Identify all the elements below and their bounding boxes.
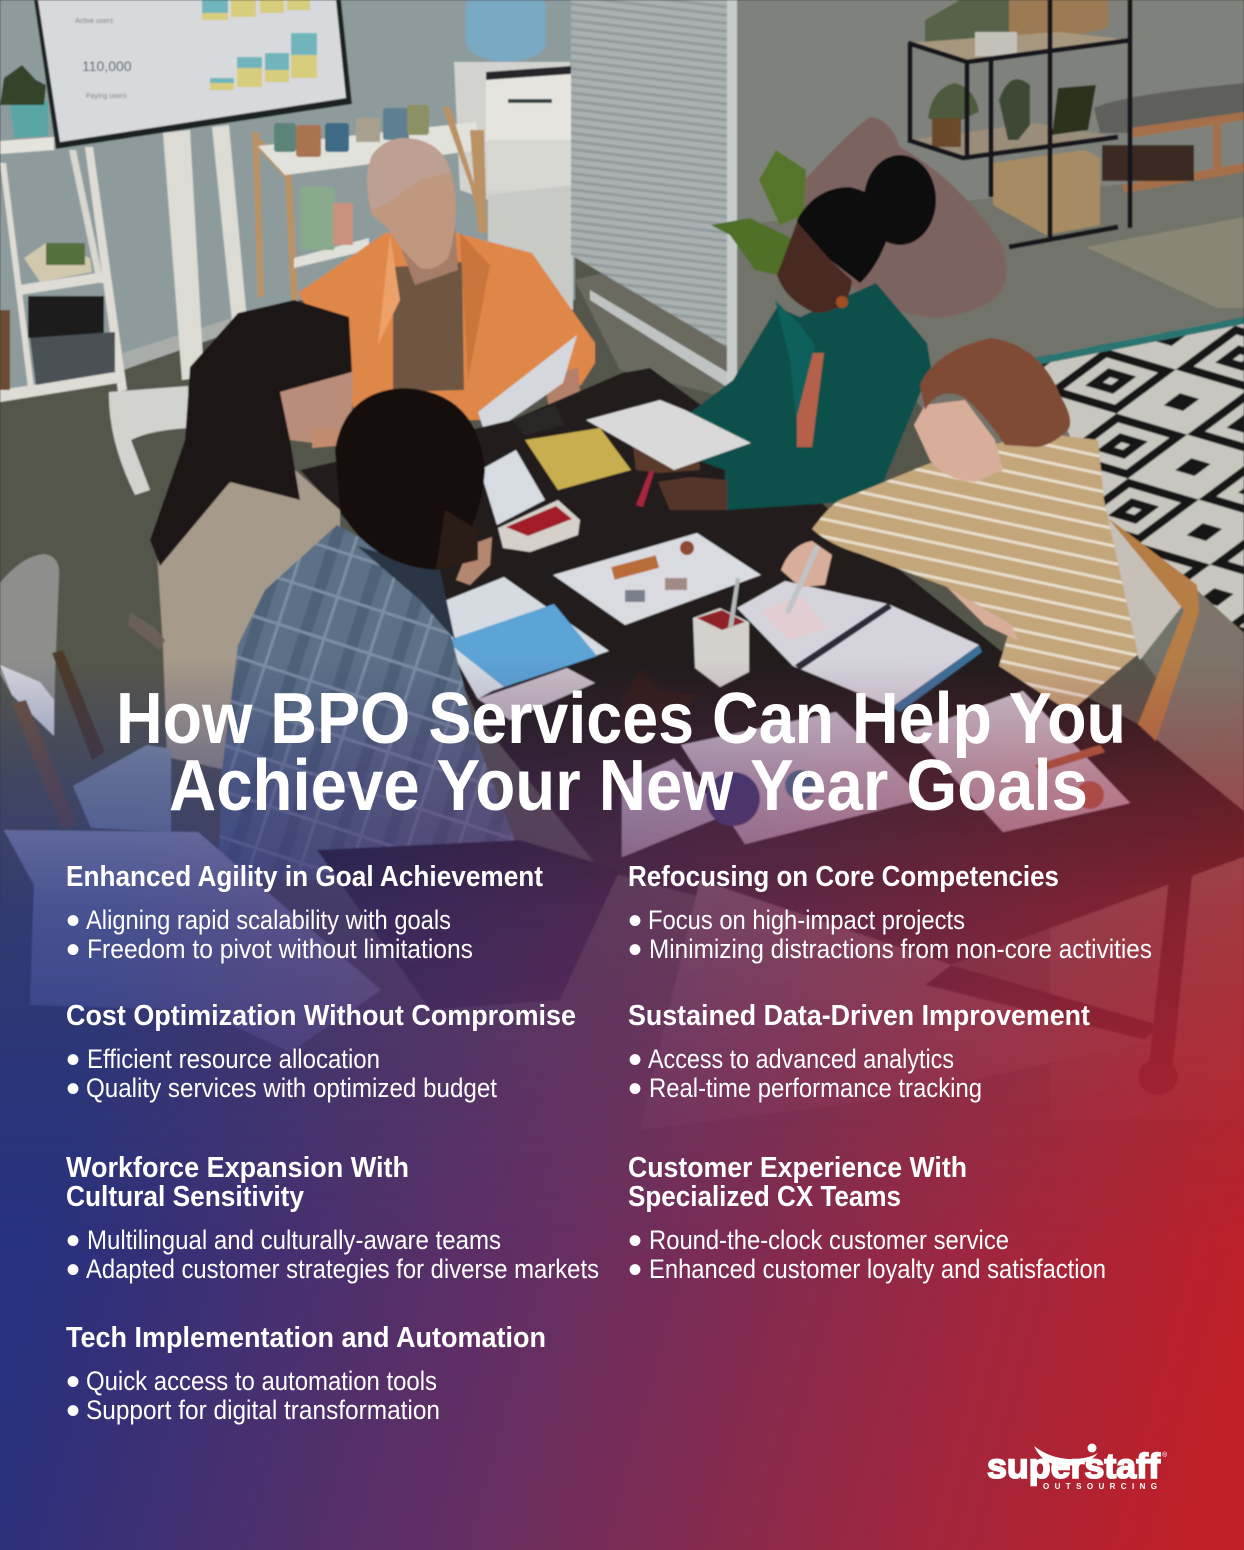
item: Sustained Data-Driven Improvement: • bbox=[628, 1038, 642, 1082]
gradient overlay: blue to red bbox=[0, 672, 1244, 1550]
item: Cost Optimization Without Compromise: • bbox=[66, 1067, 80, 1111]
item: Cost Optimization Without Compromise: • bbox=[66, 1038, 80, 1082]
item: Workforce Expansion With Cultural Sensitivity: Cultural Sensitivity bbox=[66, 1181, 304, 1213]
logo: Superstaff Outsourcing: superstaff bbox=[987, 1447, 1160, 1486]
wooden bench with shoes bbox=[1094, 83, 1244, 193]
monitor stand bbox=[109, 125, 247, 495]
annual report and lower documents bbox=[622, 691, 1130, 857]
item: Cost Optimization Without Compromise: Quality services with optimized budget bbox=[86, 1073, 498, 1103]
hands at table bbox=[456, 537, 492, 585]
item: Enhanced Agility in Goal Achievement bbox=[66, 861, 543, 972]
item: Customer Experience With Specialized CX Teams bbox=[628, 1152, 1106, 1292]
red pen bbox=[636, 470, 654, 507]
pink annotated sheet bbox=[478, 668, 595, 720]
infographic sheet centre bbox=[553, 533, 761, 625]
spiral notebook bbox=[737, 581, 982, 712]
item: Workforce Expansion With Cultural Sensitivity: Multilingual and culturally-aware teams bbox=[87, 1225, 501, 1255]
patterned pen holder bbox=[693, 578, 749, 687]
second chair bbox=[73, 745, 171, 832]
shapes beneath the gradient bbox=[4, 830, 1193, 1130]
item: Workforce Expansion With Cultural Sensitivity: Adapted customer strategies for diverse markets bbox=[86, 1254, 599, 1284]
red box with trinkets bbox=[498, 500, 580, 552]
green potted plant behind woman bbox=[711, 150, 806, 278]
wooden sideboard with mugs bbox=[252, 105, 488, 300]
lower right floor bbox=[1050, 590, 1244, 1120]
woman in striped sweater bbox=[781, 338, 1138, 712]
item: Tech Implementation and Automation: • bbox=[66, 1360, 80, 1404]
item: Tech Implementation and Automation: Quick access to automation tools bbox=[86, 1366, 437, 1396]
logo: Superstaff Outsourcing: ® bbox=[1162, 1451, 1168, 1459]
item: Customer Experience With Specialized CX Teams: • bbox=[628, 1219, 642, 1263]
office back wall bbox=[0, 0, 575, 400]
right floor bbox=[737, 172, 1244, 800]
item: Enhanced Agility in Goal Achievement: Enhanced Agility in Goal Achievement bbox=[66, 861, 543, 893]
item: Cost Optimization Without Compromise: Efficient resource allocation bbox=[87, 1044, 380, 1074]
left shelf bbox=[0, 137, 127, 402]
rug border bbox=[1033, 317, 1244, 365]
wall monitor bbox=[34, 0, 352, 149]
papers with notes bbox=[586, 400, 751, 470]
item: Customer Experience With Specialized CX Teams: Enhanced customer loyalty and satisfaction bbox=[649, 1254, 1106, 1284]
item: Sustained Data-Driven Improvement: Access to advanced analytics bbox=[648, 1044, 954, 1074]
white box bbox=[480, 450, 545, 525]
item: Customer Experience With Specialized CX Teams: Round-the-clock customer service bbox=[649, 1225, 1009, 1255]
item: Refocusing on Core Competencies bbox=[628, 861, 1152, 972]
item: Refocusing on Core Competencies: • bbox=[628, 899, 642, 943]
woman in teal blazer bbox=[632, 155, 936, 510]
window blinds bbox=[571, 0, 727, 347]
item: Enhanced Agility in Goal Achievement: • bbox=[66, 899, 80, 943]
potted plant bbox=[0, 65, 48, 138]
item: Tech Implementation and Automation: Support for digital transformation bbox=[86, 1395, 440, 1425]
item: Workforce Expansion With Cultural Sensitivity: Workforce Expansion With bbox=[66, 1152, 409, 1184]
item: Tech Implementation and Automation bbox=[66, 1322, 546, 1433]
floor mat bbox=[1086, 217, 1244, 308]
floor middle bbox=[575, 240, 737, 400]
item: Workforce Expansion With Cultural Sensitivity: • bbox=[66, 1248, 80, 1292]
wall monitor: Active users bbox=[75, 18, 114, 25]
item: Tech Implementation and Automation: • bbox=[66, 1389, 80, 1433]
item: Customer Experience With Specialized CX Teams: • bbox=[628, 1248, 642, 1292]
item: Enhanced Agility in Goal Achievement: Aligning rapid scalability with goals bbox=[86, 905, 451, 935]
item: Workforce Expansion With Cultural Sensitivity bbox=[66, 1152, 599, 1292]
logo: Superstaff Outsourcing: OUTSOURCING bbox=[1043, 1482, 1157, 1491]
item: Enhanced Agility in Goal Achievement: Freedom to pivot without limitations bbox=[87, 934, 473, 964]
small dark phone bbox=[512, 405, 565, 435]
water cooler bbox=[454, 0, 573, 310]
man in plaid shirt foreground bbox=[218, 388, 516, 880]
item: Cost Optimization Without Compromise bbox=[66, 1000, 576, 1111]
wall monitor: 110,000 bbox=[82, 58, 132, 74]
table bbox=[300, 368, 1244, 965]
shelf contents bbox=[908, 0, 1132, 235]
seated man in orange shirt bbox=[298, 138, 595, 420]
black metal shelving bbox=[908, 0, 1132, 247]
title: Achieve Your New Year Goals bbox=[169, 746, 1088, 826]
white chair bbox=[1108, 520, 1197, 660]
gesturing hand bbox=[622, 668, 697, 740]
title bbox=[116, 679, 1126, 826]
item: Sustained Data-Driven Improvement: Sustained Data-Driven Improvement bbox=[628, 1000, 1090, 1032]
woman with ponytail bbox=[128, 300, 353, 770]
blue chart sheet bbox=[427, 577, 609, 699]
wall monitor: Paying users bbox=[86, 93, 127, 100]
white chair left bbox=[0, 554, 105, 830]
man's hand and paper bbox=[478, 335, 581, 437]
item: Workforce Expansion With Cultural Sensitivity: • bbox=[66, 1219, 80, 1263]
item: Cost Optimization Without Compromise: Cost Optimization Without Compromise bbox=[66, 1000, 576, 1032]
right wall bbox=[737, 0, 1244, 225]
chair wood frame bbox=[1108, 518, 1199, 741]
baseboard bbox=[123, 318, 232, 370]
blinds post and rail bbox=[590, 0, 737, 387]
yellow notebook bbox=[525, 428, 631, 490]
area rug bbox=[1033, 317, 1244, 633]
item: Sustained Data-Driven Improvement bbox=[628, 1000, 1090, 1111]
item: Refocusing on Core Competencies: Focus on high-impact projects bbox=[648, 905, 965, 935]
title: How BPO Services Can Help You bbox=[116, 679, 1126, 759]
item: Sustained Data-Driven Improvement: Real-time performance tracking bbox=[649, 1073, 982, 1103]
item: Customer Experience With Specialized CX Teams: Specialized CX Teams bbox=[628, 1181, 901, 1213]
item: Sustained Data-Driven Improvement: • bbox=[628, 1067, 642, 1111]
pink bean bag bbox=[800, 117, 1006, 318]
item: Refocusing on Core Competencies: • bbox=[628, 928, 642, 972]
item: Refocusing on Core Competencies: Refocusing on Core Competencies bbox=[628, 861, 1059, 893]
item: Customer Experience With Specialized CX Teams: Customer Experience With bbox=[628, 1152, 967, 1184]
item: Enhanced Agility in Goal Achievement: • bbox=[66, 928, 80, 972]
item: Refocusing on Core Competencies: Minimizing distractions from non-core activities bbox=[649, 934, 1152, 964]
item: Tech Implementation and Automation: Tech Implementation and Automation bbox=[66, 1322, 546, 1354]
